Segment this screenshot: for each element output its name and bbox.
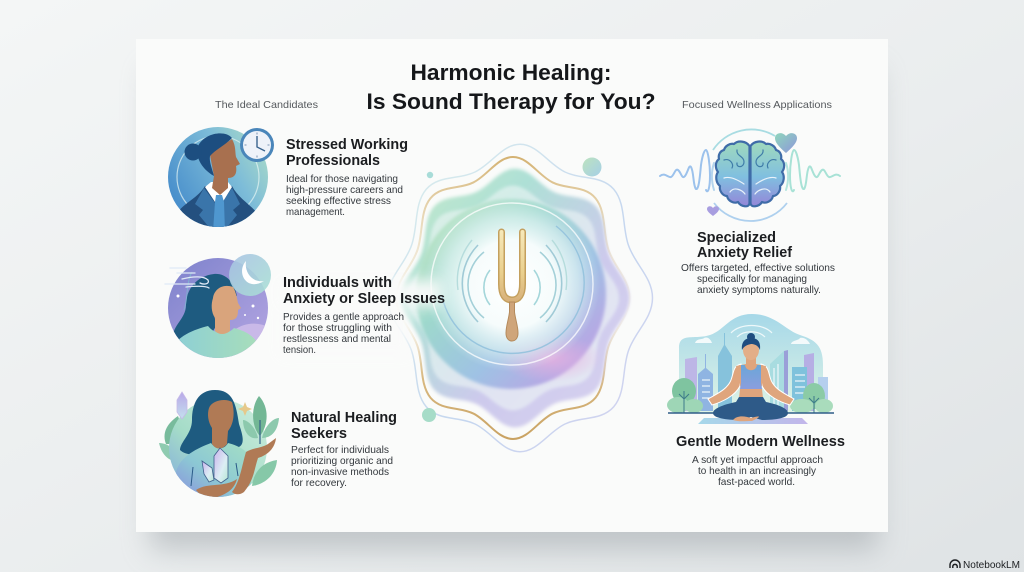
floating dots <box>422 158 602 422</box>
text: specialized anxiety relief: Anxiety Relief <box>697 244 793 261</box>
icon: heart <box>775 133 797 153</box>
outer colour blob <box>401 169 629 427</box>
city skyline <box>685 333 828 411</box>
text: gentle modern wellness: to health in an increasingly <box>698 466 817 477</box>
icon: brain with sound waves <box>660 129 840 221</box>
waves <box>660 150 840 191</box>
text: stressed working professionals: seeking effective stress <box>286 196 391 207</box>
inner pale blob <box>407 186 619 410</box>
right column heading: Focused Wellness Applications <box>682 99 832 111</box>
text: natural healing seekers: for recovery. <box>291 478 347 489</box>
text: anxiety or sleep issues: Anxiety or Sleep Issues <box>283 290 445 307</box>
text: anxiety or sleep issues: restlessness and mental <box>283 334 391 345</box>
concentric rings <box>431 203 593 365</box>
icon: meditating figure in city <box>667 314 834 424</box>
icon: moon <box>229 254 271 296</box>
text: anxiety or sleep issues: Individuals with <box>283 274 392 291</box>
text: stressed working professionals: Stressed Working <box>286 136 408 153</box>
white core <box>424 196 600 372</box>
text: natural healing seekers: Natural Healing <box>291 409 397 426</box>
text: anxiety or sleep issues: Provides a gentle approach <box>283 312 404 323</box>
central sound wave illustration <box>388 144 652 452</box>
text: natural healing seekers: Perfect for individuals <box>291 445 389 456</box>
icon: clock <box>240 128 274 162</box>
sound arcs <box>731 326 772 337</box>
text: specialized anxiety relief: specifically for managing <box>697 274 807 285</box>
icon: small heart <box>707 206 719 216</box>
brain left lobe <box>716 142 750 206</box>
text: specialized anxiety relief <box>681 229 835 296</box>
text: stressed working professionals: management. <box>286 207 345 218</box>
text: anxiety or sleep issues: for those struggling with <box>283 323 392 334</box>
outer thin wavy ring <box>388 144 652 452</box>
yoga mat <box>698 418 808 424</box>
icon: crystals <box>177 392 228 483</box>
ground line <box>668 412 834 414</box>
gradient disc <box>416 199 606 389</box>
icon: leaves left <box>159 416 180 462</box>
left column heading: The Ideal Candidates <box>215 99 318 111</box>
brain folds <box>724 150 776 168</box>
text: stressed working professionals: high-pressure careers and <box>286 185 403 196</box>
arcs <box>713 129 775 150</box>
icon: notebook arcs <box>950 560 960 568</box>
tuning fork <box>502 232 522 341</box>
text: natural healing seekers: prioritizing organic and <box>291 456 393 467</box>
text: gentle modern wellness: fast-paced world. <box>718 477 795 488</box>
text: stressed working professionals <box>286 136 408 218</box>
text: stressed working professionals: Professionals <box>286 152 380 169</box>
face <box>208 400 234 448</box>
icon: wind lines <box>165 268 209 288</box>
main panel <box>136 39 888 532</box>
text: natural healing seekers: Seekers <box>291 425 347 442</box>
icon: plant in hand <box>232 396 279 494</box>
title <box>366 60 656 114</box>
icon: stressed professional <box>168 127 274 232</box>
text: anxiety or sleep issues: tension. <box>283 345 316 356</box>
text: natural healing seekers: non-invasive methods <box>291 467 389 478</box>
text: anxiety or sleep issues <box>283 274 445 356</box>
text: stressed working professionals: Ideal for those navigating <box>286 174 398 185</box>
text: specialized anxiety relief: Specialized <box>697 229 776 246</box>
clouds <box>695 337 810 344</box>
gold wavy ring <box>396 157 630 439</box>
text: specialized anxiety relief: anxiety symptoms naturally. <box>697 285 821 296</box>
text: specialized anxiety relief: Offers targeted, effective solutions <box>681 263 835 274</box>
body <box>176 443 252 500</box>
pink glow <box>498 334 602 382</box>
trees <box>667 378 833 413</box>
brain right lobe <box>750 142 784 206</box>
title: Is Sound Therapy for You? <box>366 89 656 114</box>
text: gentle modern wellness <box>676 433 845 488</box>
text: gentle modern wellness: A soft yet impactful approach <box>692 455 823 466</box>
title: Harmonic Healing: <box>410 60 612 85</box>
icon: natural healing <box>159 390 279 500</box>
text: gentle modern wellness: Gentle Modern Wellness <box>676 433 845 450</box>
NotebookLM watermark: NotebookLM <box>963 559 1020 571</box>
text: natural healing seekers <box>291 409 397 489</box>
icon: anxiety and sleep <box>165 254 275 362</box>
meditating figure <box>708 333 794 421</box>
hair <box>180 390 243 454</box>
